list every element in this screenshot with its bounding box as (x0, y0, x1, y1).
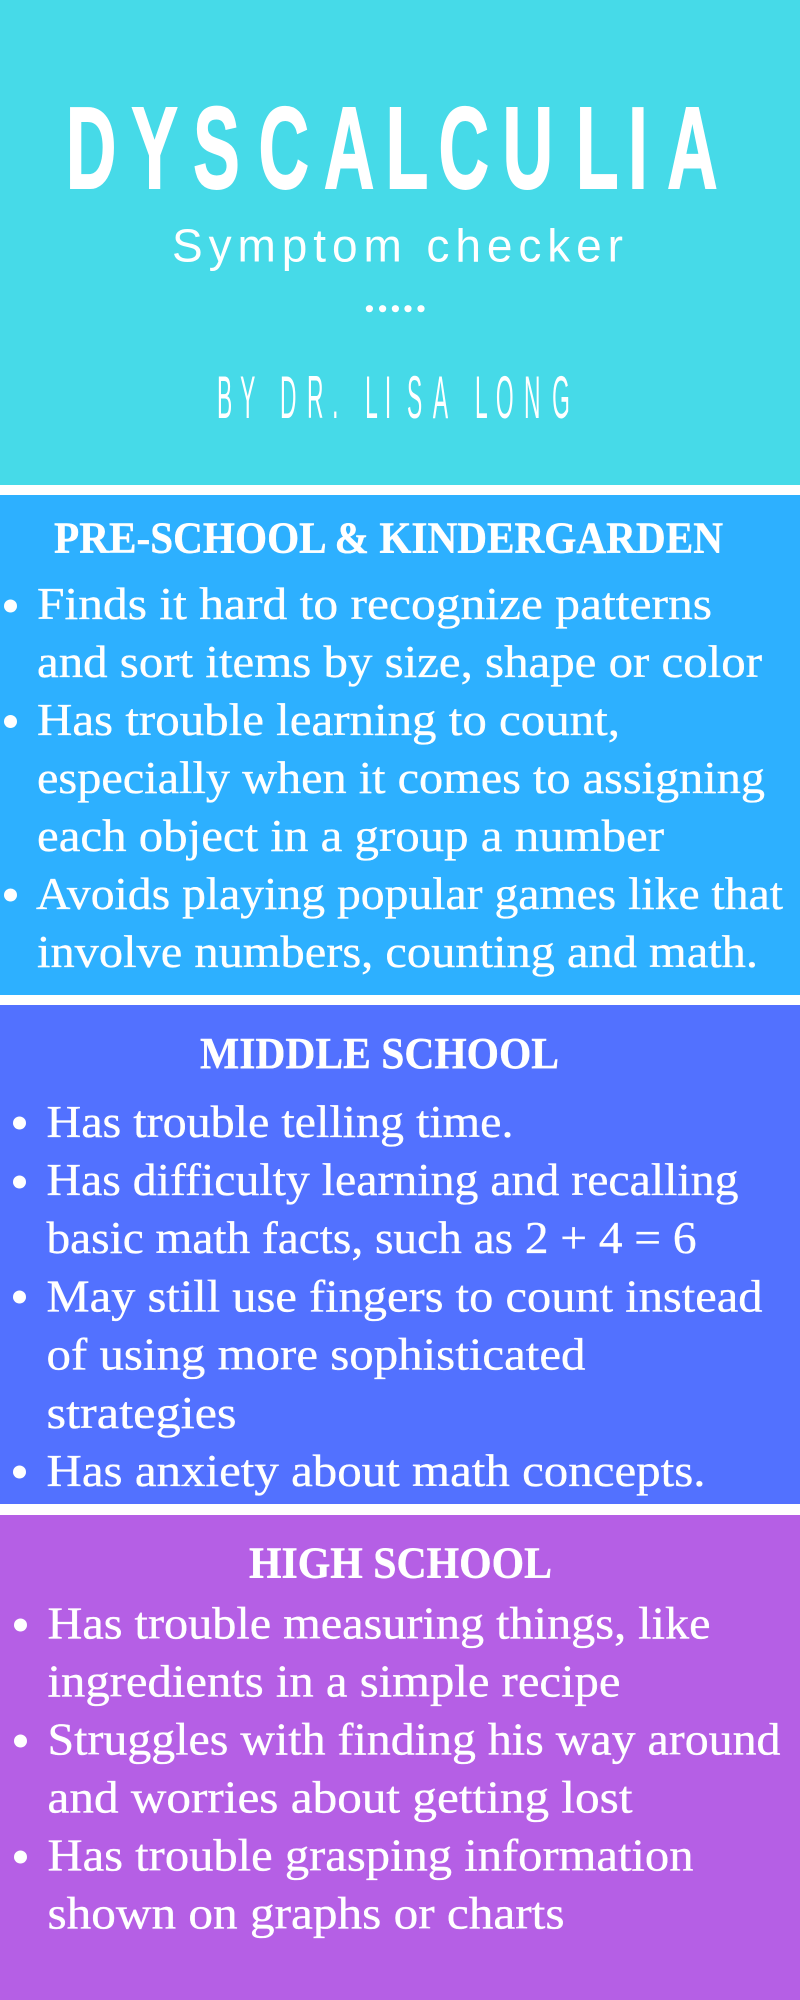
bullet list: high school symptoms: Has trouble measuring things, like (48, 1598, 710, 1648)
bullet list: middle school symptoms: Has trouble telling time. (46, 1096, 514, 1147)
bullet list: pre-school symptoms: each object in a group a number (37, 810, 664, 861)
bullet list: high school symptoms: Has trouble grasping information (48, 1830, 694, 1880)
bullet list: middle school symptoms: basic math facts, such as 2 + 4 = 6 (46, 1212, 696, 1263)
bullet list: pre-school symptoms: Finds it hard to recognize patterns (37, 578, 712, 629)
byline: BY DR. LISA LONG (217, 364, 570, 431)
bullet list: high school symptoms: ingredients in a simple recipe (48, 1656, 620, 1706)
bullet list: middle school symptoms: May still use fingers to count instead (46, 1270, 762, 1322)
decorative dots (366, 305, 425, 312)
heading: pre-school and kindergarden: PRE-SCHOOL & KINDERGARDEN (54, 514, 723, 562)
bullet list: high school symptoms: and worries about getting lost (48, 1772, 633, 1822)
bullet list: high school symptoms: Struggles with finding his way around (48, 1714, 780, 1764)
bullet list: middle school symptoms: strategies (46, 1387, 236, 1438)
bullet list: middle school symptoms: of using more sophisticated (46, 1328, 586, 1380)
bullet list: middle school symptoms: Has difficulty learning and recalling (46, 1154, 739, 1205)
bullet list: pre-school symptoms: Has trouble learning to count, (37, 694, 620, 745)
panel: high school (0, 1515, 800, 2000)
subtitle: Symptom checker (172, 220, 623, 272)
bullet list: pre-school symptoms (4, 578, 783, 977)
panel: header (0, 0, 800, 485)
heading: middle school: MIDDLE SCHOOL (200, 1029, 559, 1078)
bullet list: pre-school symptoms: Avoids playing popular games like that (36, 868, 783, 919)
bullet list: pre-school symptoms: and sort items by size, shape or color (37, 636, 762, 687)
bullet list: high school symptoms (14, 1598, 780, 1938)
bullet list: middle school symptoms: Has anxiety about math concepts. (46, 1445, 706, 1496)
bullet list: pre-school symptoms: especially when it comes to assigning (37, 752, 765, 803)
panel: pre-school and kindergarden (0, 495, 800, 995)
panel: middle school (0, 1005, 800, 1504)
bullet list: middle school symptoms (13, 1096, 762, 1496)
bullet list: high school symptoms: shown on graphs or charts (48, 1888, 564, 1938)
heading: high school: HIGH SCHOOL (249, 1538, 552, 1588)
bullet list: pre-school symptoms: involve numbers, counting and math. (37, 926, 758, 977)
title: DYSCALCULIA (66, 84, 717, 213)
